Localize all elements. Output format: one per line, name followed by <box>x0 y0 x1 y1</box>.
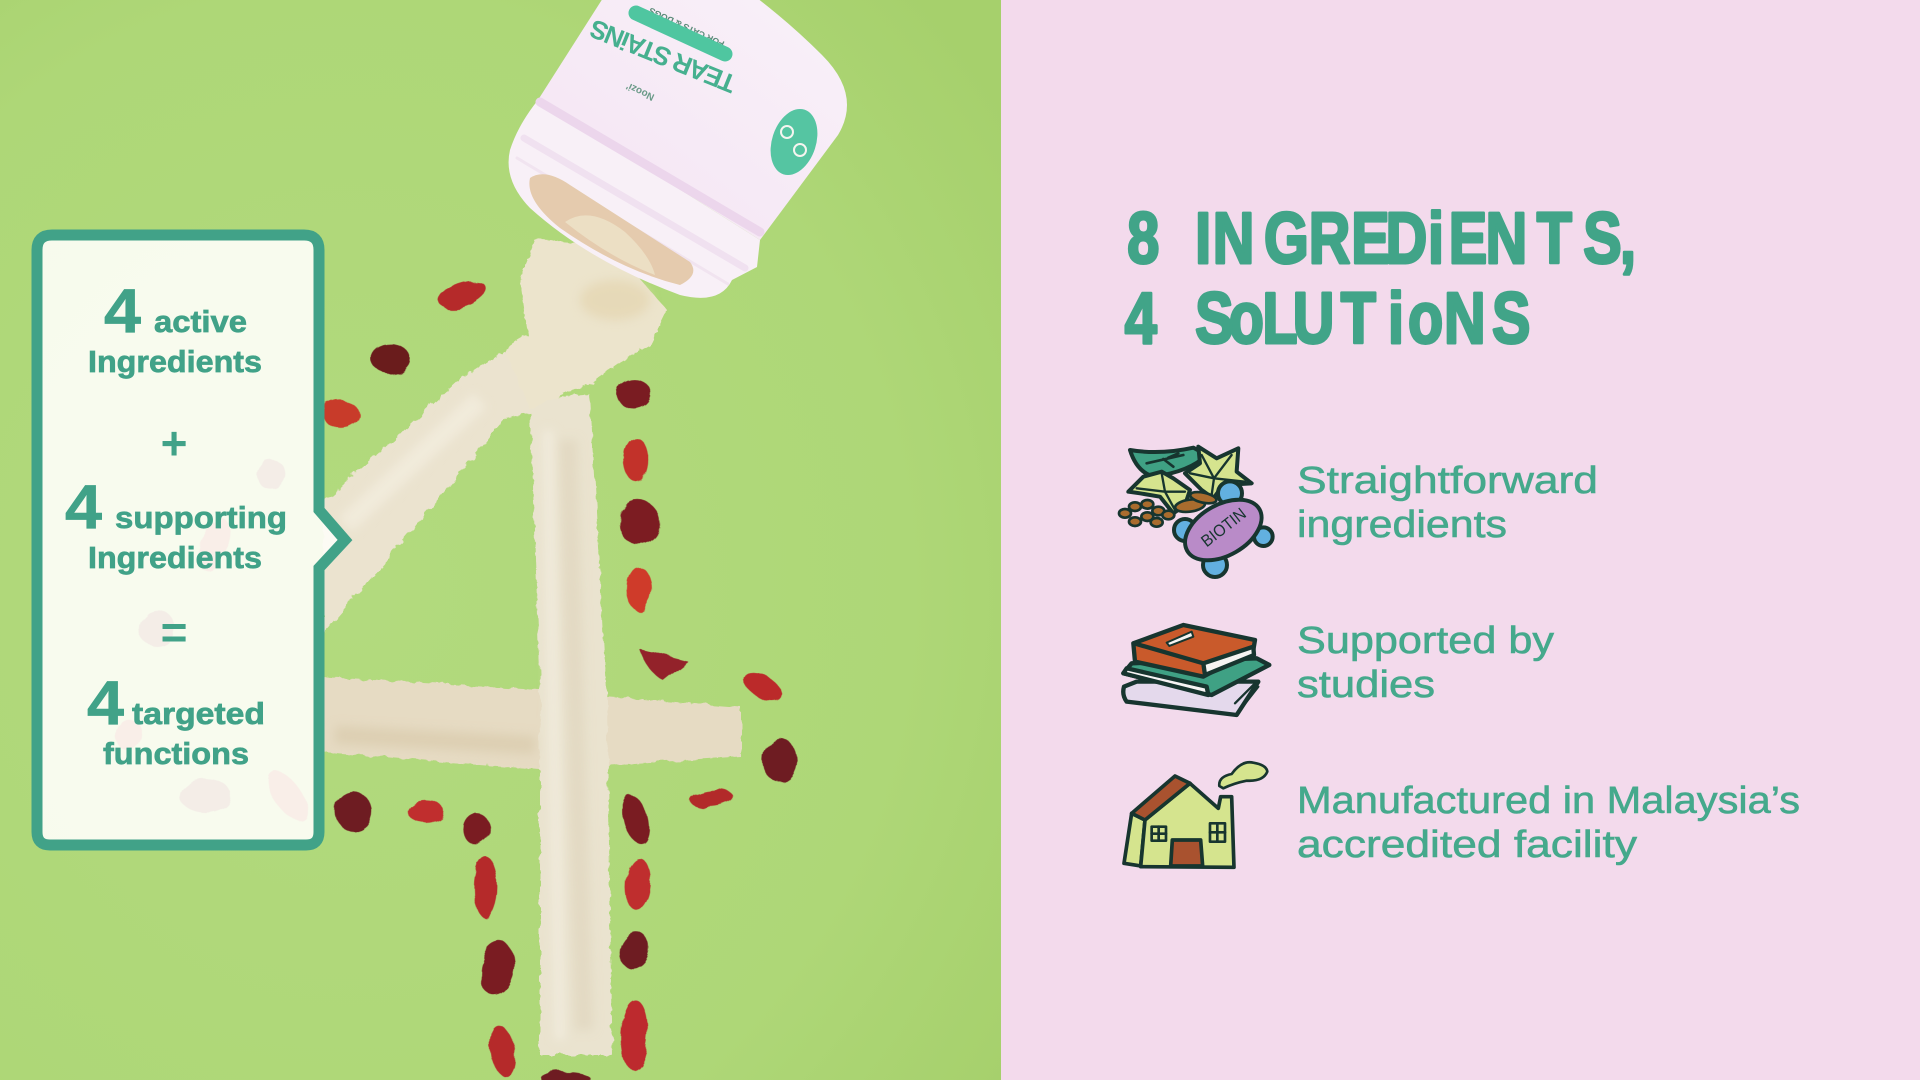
text: straightforward ingredients: ingredients <box>1297 504 1507 546</box>
callout plus sign: + <box>161 417 187 469</box>
callout text: 4 active ingredients <box>88 277 262 379</box>
text: straightforward ingredients <box>1297 460 1598 546</box>
powder number four <box>323 240 741 1055</box>
callout text: 4 active ingredients: active <box>154 304 247 339</box>
jar label text: TEAR STAiNS <box>585 13 740 99</box>
text: supported by studies: studies <box>1297 664 1435 706</box>
callout text: 4 supporting ingredients: 4 <box>65 473 103 542</box>
text: manufactured in malaysia <box>1297 780 1800 866</box>
callout panel <box>37 235 345 845</box>
icon: house factory with smoke <box>1124 762 1267 867</box>
callout text: 4 supporting ingredients: supporting <box>115 500 287 535</box>
panel: pink right background <box>1001 0 1920 1080</box>
text: manufactured in malaysia: accredited facility <box>1297 824 1637 866</box>
callout text: 4 targeted functions <box>87 669 265 771</box>
text: straightforward ingredients: Straightforward <box>1297 460 1598 502</box>
callout text: 4 supporting ingredients <box>65 473 287 575</box>
text: supported by studies: Supported by <box>1297 620 1554 662</box>
icon label: biotin: BIOTIN <box>1197 504 1250 551</box>
callout text: 4 supporting ingredients: Ingredients <box>88 540 262 575</box>
title: 8 INGREDiENTS, <box>1127 198 1636 278</box>
callout text: 4 targeted functions: targeted <box>132 696 265 731</box>
goji berries <box>115 276 797 1080</box>
callout text: 4 active ingredients: Ingredients <box>88 344 262 379</box>
jar label text: FOR CATS & DOGS <box>647 6 726 49</box>
text: manufactured in malaysia: Manufactured in Malaysia’s <box>1297 780 1800 822</box>
callout text: 4 targeted functions: 4 <box>87 669 125 738</box>
text: supported by studies <box>1297 620 1554 706</box>
title: 4 SoLUTioNS <box>1125 278 1530 358</box>
icon: stack of books <box>1123 625 1269 715</box>
jar of supplement powder <box>509 0 847 298</box>
jar label text: Noozi' <box>625 80 656 102</box>
icon: botanicals and biotin <box>1119 447 1273 577</box>
title <box>1125 198 1636 358</box>
callout text: 4 targeted functions: functions <box>103 736 249 771</box>
callout text: 4 active ingredients: 4 <box>104 277 142 346</box>
panel: photo background <box>0 0 1001 1080</box>
callout equals sign: = <box>161 606 187 658</box>
jar green seal <box>763 103 825 181</box>
